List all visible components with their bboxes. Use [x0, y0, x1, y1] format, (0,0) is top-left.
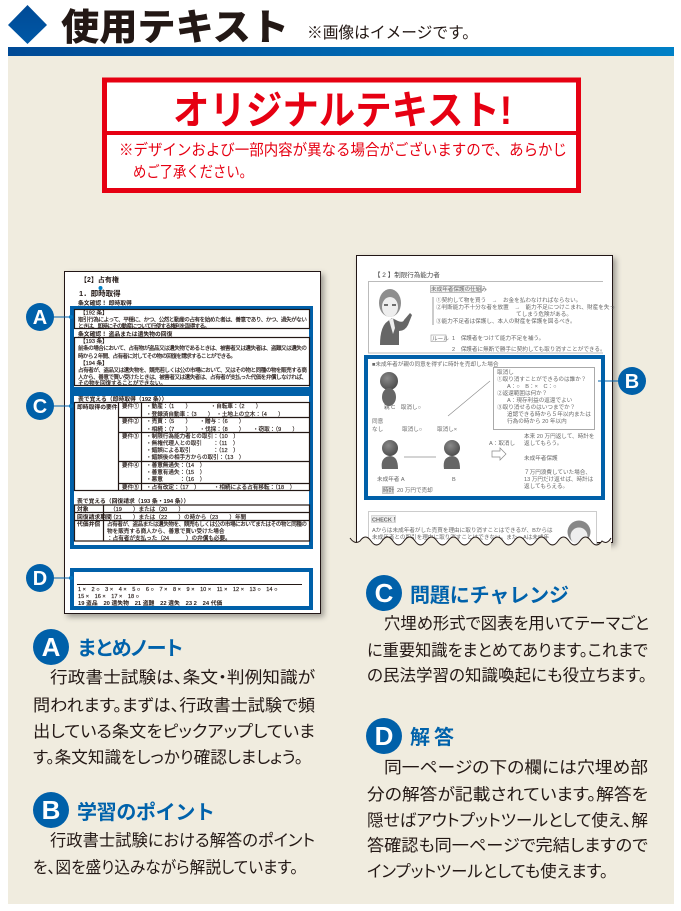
wavy edge — [350, 537, 611, 556]
icon: C badge — [366, 575, 402, 611]
marker: C: C — [33, 396, 47, 418]
highlight box B: 行為の時から 20 年以内 — [507, 417, 567, 425]
intro box: 2 保護者に無断で勝手に契約しても取り消すことができる。 — [452, 345, 606, 353]
highlight box A: 【193 条】 — [80, 337, 108, 345]
icon: student face — [568, 520, 590, 544]
highlight box B: 返してもらう。 — [524, 439, 562, 447]
highlight box B: ③取り消せるのはいつまでか？ — [497, 403, 575, 411]
callout heading: オリジナルテキスト! — [173, 89, 512, 133]
intro box: ①契約して物を買う → お金を払わなければならない。 — [436, 296, 581, 304]
highlight box C: 代価弁償 — [77, 520, 100, 528]
highlight box C: ・善意有過失：（15 ） — [146, 468, 205, 476]
marker: A: A — [33, 307, 47, 329]
intro box: ②判断能力不十分な者を放置 → 能力不足につけこまれ、財産を失っ — [436, 303, 615, 311]
highlight box C: （21 ）または（22 ）の時から（23 ）年間 — [110, 513, 247, 521]
highlight box A: 時から２年間、占有者に対してその物の回復を請求することができる。 — [78, 352, 236, 360]
text block: B: B — [42, 795, 60, 825]
highlight box C: ・錯誤による取引 ：（12 ） — [146, 446, 239, 454]
highlight box C: 回復請求期間 — [77, 513, 112, 521]
callout note: ※デザインおよび一部内容が異なる場合がございますので、あらかじ — [119, 140, 567, 159]
icon: B badge — [33, 792, 69, 828]
text block: A: 問われます。まずは、行政書士試験で頻 — [33, 696, 316, 715]
highlight box C: 要件② — [122, 417, 139, 425]
text block: B: を、図を盛り込みながら解説しています。 — [33, 858, 298, 877]
icon: minor A — [382, 440, 398, 469]
heading: まとめノート — [77, 638, 184, 660]
highlight box C: ・悪意 ：（16 ） — [146, 475, 205, 483]
icon: A badge — [33, 629, 69, 665]
intro box: 1 保護者をつけて能力不足を補う。 — [452, 334, 544, 342]
highlight box A: 占有者が、盗品又は遺失物を、競売若しくは公の市場において、又はその物と同種の物を販売する商 — [78, 366, 307, 374]
text block: B — [33, 792, 315, 877]
highlight box B: 取消し× — [437, 425, 457, 433]
intro box — [368, 282, 615, 353]
highlight box A: 前条の場合において、占有物が盗品又は遺失物であるときは、被害者又は遺失者は、盗難又は遺失の — [78, 344, 307, 352]
text block: C — [366, 575, 649, 685]
icon: person B — [444, 440, 460, 469]
highlight box B: A：取消し — [489, 439, 516, 447]
panel: left sample page: 1．即時取得 — [79, 288, 121, 298]
panel: right sample page — [33, 256, 649, 881]
text block: A: 出している条文をピックアップしていま — [33, 722, 315, 741]
text block: A: す。条文知識をしっかり確認しましょう。 — [33, 748, 303, 767]
text block: D: インプットツールとしても使えます。 — [367, 862, 608, 881]
highlight box C: ・制限行為能力者との取引：（10 ） — [146, 432, 239, 440]
icon: D badge — [366, 718, 402, 754]
check box: 未成年者との取引を理由に取り消すことはできない。また、Aは未成年 — [372, 533, 549, 541]
text block: C: に重要知識をまとめてあります。これまで — [367, 641, 648, 660]
highlight box C: ・占有改定：（17 ） ・相続による占有移転：（18 ） — [146, 483, 295, 491]
marker: B: B — [625, 371, 639, 393]
text block: A: A — [42, 632, 61, 662]
highlight box C: 占有者が、盗品または遺失物を、競売もしくは公の市場においてまたはその物と同種の — [107, 520, 307, 528]
highlight box C: 要件⑤ — [122, 483, 139, 491]
highlight box B: ①取り消すことができるのは誰か？ — [497, 375, 586, 383]
text block: C: 穴埋め形式で図表を用いてテーマごと — [384, 614, 649, 633]
header — [8, 5, 674, 56]
highlight box A — [72, 308, 311, 389]
intro box: ルール — [432, 336, 449, 342]
highlight box C: 要件① — [122, 402, 139, 410]
panel: left sample page: 条文確認！ 即時取得 — [78, 299, 132, 307]
highlight box B: ■未成年者が親の同意を得ずに時計を売却した場合 — [372, 360, 499, 368]
highlight box A: 条文確認！ 盗品または遺失物の回復 — [78, 330, 173, 338]
highlight box D: 15 × 16 × 17 × 18 ○ — [78, 594, 139, 600]
highlight box A: 取引行為によって、平穏に、かつ、公然と動産の占有を始めた者は、善意であり、かつ、過失がない — [78, 316, 307, 324]
highlight box B: 取消し — [497, 368, 514, 376]
highlight box C: 即時取得の要件 — [77, 403, 118, 411]
highlight box C: （19 ）または（20 ） — [110, 506, 184, 513]
highlight box C: ・錯誤後の相手方からの取引：（13 ） — [146, 453, 245, 461]
highlight box A: 人から、善意で買い受けたときは、被害者又は遺失者は、占有者が支払った代価を弁償しなければ、 — [78, 373, 307, 381]
highlight box C: 要件③ — [122, 432, 139, 440]
header bar — [8, 47, 674, 56]
marker: A — [26, 303, 73, 331]
highlight box C: 対象 — [77, 505, 89, 513]
marker: D: D — [33, 568, 47, 590]
highlight box B: 未成年者 A — [377, 475, 405, 483]
highlight box A: ときは、即時にその動産について行使する権利を取得する。 — [78, 322, 210, 330]
check box: Aからは未成年者がした売買を理由に取り消すことはできるが、Bからは — [372, 526, 553, 534]
heading: 問題にチャレンジ — [410, 585, 569, 607]
marker: C — [26, 392, 73, 420]
highlight box B: A：○ B：× C：○ — [507, 384, 556, 390]
text block: D: D — [375, 721, 393, 751]
intro box: てしまう危険がある。 — [516, 310, 572, 318]
heading: 学習のポイント — [77, 801, 215, 824]
highlight box C: ・相続：（7 ） ・伐採：（8 ） ・窃取：（9 ） — [146, 425, 298, 433]
text block: D: 隠せばアウトプットツールとして使え、解 — [367, 811, 648, 830]
title: 使用テキスト — [61, 7, 289, 48]
highlight box B: 20 万円で売却 — [397, 486, 433, 494]
text block: B: 行政書士試験における解答のポイント — [50, 831, 315, 850]
highlight box D: 19 盗品 20 遺失物 21 盗難 22 遺失 23 2 24 代価 — [78, 599, 223, 607]
highlight box B: 返してもらえる。 — [524, 482, 568, 490]
highlight box D — [72, 570, 311, 608]
highlight box D: 1 × 2 ○ 3 × 4 × 5 ○ 6 ○ 7 × 8 × 9 × 10 × 11 × 12 × 13 ○ 14 ○ — [78, 587, 277, 593]
callout note: めご了承ください。 — [133, 163, 253, 181]
page heading: 【2】占有権 — [80, 275, 119, 284]
marker: B — [598, 367, 646, 395]
highlight box B — [366, 357, 603, 498]
highlight box B: 13 万円だけ返せば、時計は — [524, 475, 594, 483]
text block: D: 同一ページの下の欄には穴埋め部 — [384, 758, 648, 777]
highlight box B: 本来 20 万円返して、時計を — [524, 432, 594, 440]
highlight box C: ・売買：（5 ） ・贈与：（6 ） — [146, 417, 245, 425]
highlight box B: 同意 — [372, 417, 384, 425]
highlight box B: B — [452, 477, 456, 483]
check box: CHECK！ — [372, 516, 397, 524]
text block: D: 答確認も同一ページで完結しますので — [367, 836, 648, 855]
highlight box C: 表で覚える（即時取得（192 条）） — [78, 395, 167, 403]
highlight box B: 取消し○ — [402, 425, 422, 433]
arrow — [492, 448, 506, 460]
text block: D — [366, 718, 648, 881]
page heading: 【 2 】制限行為能力者 — [374, 270, 440, 279]
highlight box C: ・善意無過失：（14 ） — [146, 461, 205, 469]
highlight box C: 要件④ — [122, 461, 139, 469]
check box — [368, 512, 596, 544]
callout: original text notice — [104, 80, 579, 190]
highlight box C: ：占有者が支払った（24 ）の弁償も必要。 — [107, 534, 231, 542]
highlight box B: 追認できる時から５年以内または — [507, 410, 591, 418]
highlight box B: 時計 — [383, 486, 395, 494]
heading: 解答 — [410, 725, 454, 749]
text block: D: 分の解答が記載されています。解答を — [367, 785, 648, 804]
panel: left sample page — [64, 272, 320, 614]
highlight box C: 表で覚える（回復請求（193 条・194 条）） — [77, 497, 189, 505]
highlight box B: なし — [372, 426, 384, 433]
highlight box A: 【194 条】 — [80, 359, 108, 367]
highlight box B: A：現存利益の返還でよい — [507, 396, 573, 404]
highlight box A: その物を回復することができない。 — [78, 379, 166, 387]
highlight box B: ７万円浪費していた場合、 — [524, 468, 591, 476]
highlight box C: ・登録済自動車：（3 ） ・土地上の立木：（4 ） — [146, 410, 284, 418]
text block: C: の民法学習の知識喚起にも役立ちます。 — [367, 666, 647, 685]
highlight box B: 親 C 取消し○ — [384, 403, 421, 411]
text block: C: C — [375, 578, 394, 608]
text block: A: 行政書士試験は、条文・判例知識が — [50, 668, 316, 687]
text block: A — [33, 629, 316, 767]
highlight box C: 物を販売する商人から、善意で買い受けた場合 — [107, 527, 225, 535]
icon: parent C — [380, 372, 398, 406]
marker: D — [26, 564, 73, 592]
icon: teacher — [379, 289, 412, 345]
intro box: 未成年者保護の仕組み — [431, 285, 487, 293]
highlight box A: 【192 条】 — [80, 308, 108, 316]
intro box: ③能力不足者は保護し、本人の財産を保護を図るべき。 — [436, 317, 576, 325]
highlight box B: ②返還範囲は何か？ — [497, 389, 547, 397]
highlight box C: ・動産：（1 ） ・自転車：（2 ） — [146, 402, 261, 410]
icon: blue diamond — [8, 5, 47, 44]
image note: ※画像はイメージです。 — [307, 24, 478, 42]
highlight box C: ・無権代理人との取引 ：（11 ） — [146, 439, 238, 447]
highlight box C — [72, 387, 311, 547]
highlight box B: 未成年者保護 — [524, 454, 558, 462]
